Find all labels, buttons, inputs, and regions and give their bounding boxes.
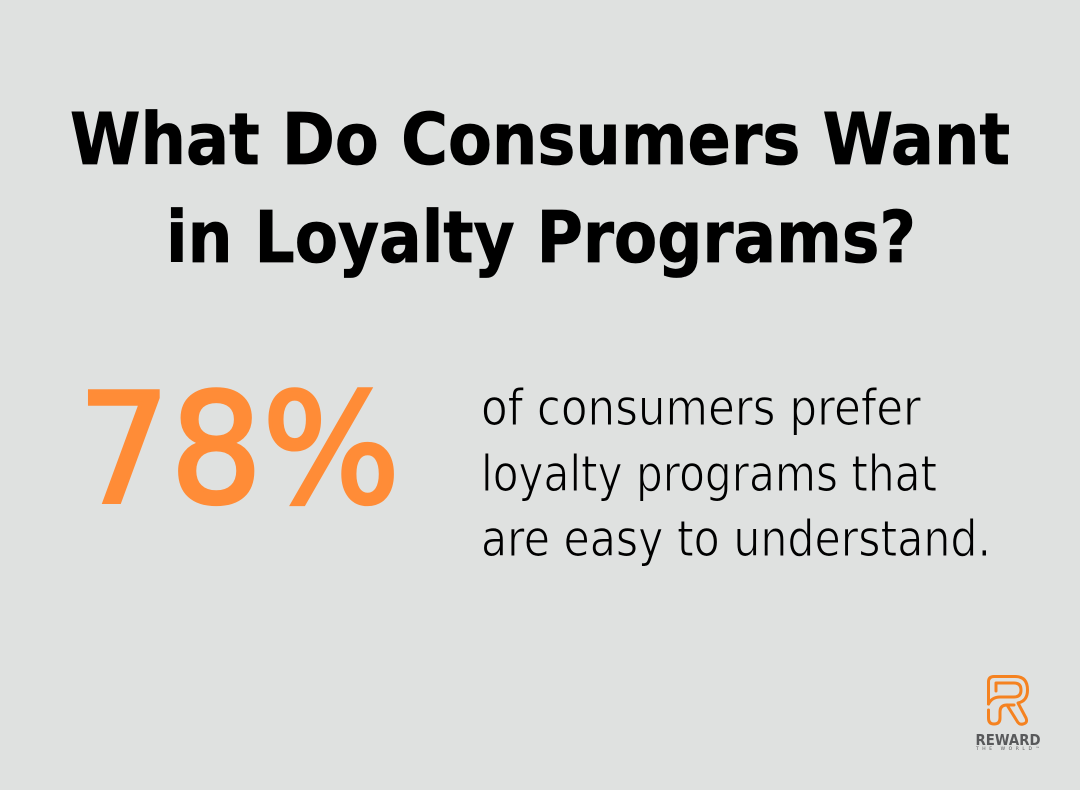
description text bbox=[481, 379, 991, 568]
description text: are easy to understand. bbox=[481, 510, 991, 568]
title: in Loyalty Programs? bbox=[166, 196, 916, 279]
description text: of consumers prefer bbox=[481, 379, 921, 437]
title bbox=[70, 98, 1010, 279]
statistic: 78%: 78% bbox=[78, 361, 400, 538]
wordmark: REWARD bbox=[976, 731, 1040, 749]
tagline: THE WORLD™ bbox=[975, 746, 1040, 752]
description text: loyalty programs that bbox=[481, 445, 937, 503]
logo: Reward the World bbox=[975, 676, 1040, 752]
icon: R mark bbox=[988, 676, 1028, 724]
